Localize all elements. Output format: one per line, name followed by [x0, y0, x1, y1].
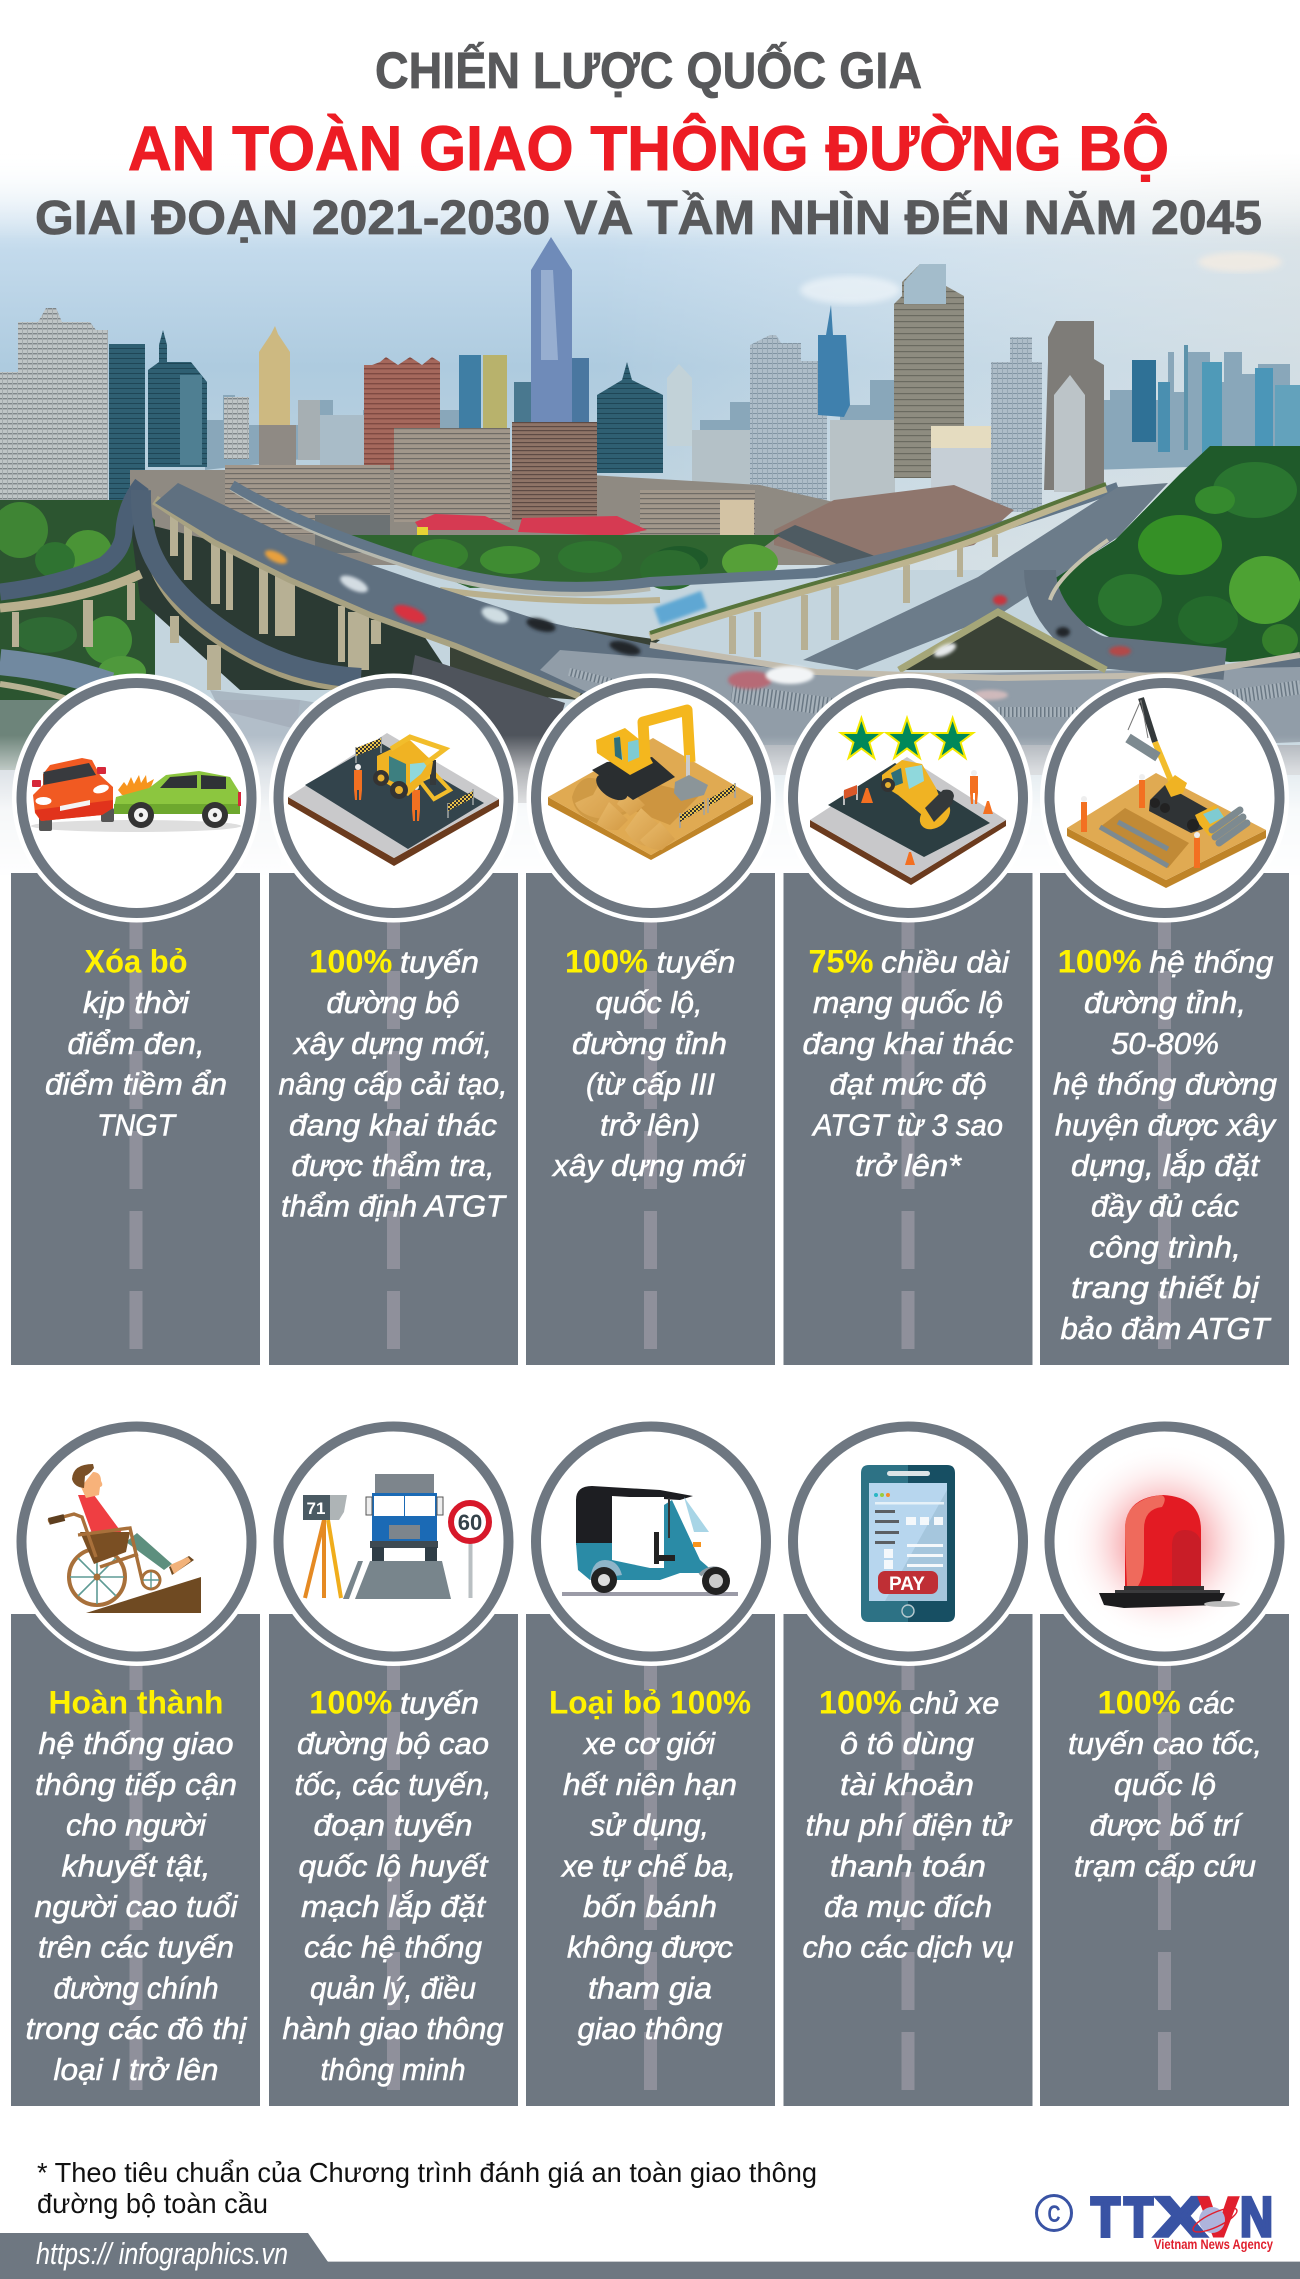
column text: row 1 column 5: đầy đủ các	[1091, 1189, 1239, 1224]
column text: row 2 column 2: tuyến	[400, 1686, 479, 1720]
icon: speed camera, truck and 60 sign: 71	[307, 1499, 325, 1518]
logo: TTXVN: Vietnam News Agency	[1154, 2236, 1273, 2252]
column text: row 1 column 3: (từ cấp III	[586, 1067, 715, 1102]
column text: row 2 column 5: các	[1188, 1686, 1235, 1720]
title line 1: CHIẾN LƯỢC QUỐC GIA	[375, 41, 922, 99]
column text: row 1 column 3: tuyến	[656, 944, 736, 980]
column text: row 1 column 3	[551, 944, 746, 1183]
footnote	[37, 2157, 817, 2219]
column text: row 1 column 5: dựng, lắp đặt	[1071, 1148, 1260, 1183]
footnote: đường bộ toàn cầu	[37, 2188, 268, 2219]
icon: red siren	[1064, 1443, 1264, 1643]
column text: row 2 column 4: thu phí điện tử	[806, 1808, 1013, 1843]
icon: phone with pay button: PAY	[889, 1574, 925, 1595]
column text: row 2 column 1: người cao tuổi	[34, 1889, 239, 1924]
worker	[970, 770, 978, 804]
column text: row 1 column 4	[802, 944, 1014, 1183]
column text: row 2 column 3: xe tự chế ba,	[560, 1848, 736, 1883]
column text: row 2 column 2: hành giao thông	[282, 2011, 504, 2046]
title	[35, 41, 1262, 245]
elevated roads	[232, 487, 650, 592]
column text: row 2 column 5	[1068, 1684, 1262, 1883]
column text: row 1 column 1: kịp thời	[83, 985, 190, 1020]
column text: row 1 column 4: 75%	[808, 944, 874, 980]
column text: row 1 column 2: đường bộ	[326, 985, 460, 1020]
column text: row 2 column 3	[549, 1684, 751, 2046]
worker 2	[412, 784, 420, 821]
column text: row 1 column 3: 100%	[565, 944, 648, 980]
column text: row 2 column 1: hệ thống giao	[38, 1726, 234, 1761]
column text: row 2 column 2: quản lý, điều	[310, 1970, 476, 2005]
column text: row 1 column 2: xây dựng mới,	[292, 1026, 492, 1061]
circular badges	[12, 674, 1288, 1666]
column text: row 1 column 4: trở lên*	[855, 1148, 962, 1183]
logo: TTXVN: X	[1155, 2185, 1206, 2248]
column text: row 2 column 5: 100%	[1098, 1684, 1181, 1720]
column text: row 1 column 2	[278, 944, 508, 1224]
column text: row 1 column 5: bảo đảm ATGT	[1060, 1311, 1272, 1346]
trees and under-bridge shadow	[0, 500, 155, 770]
column text: row 1 column 4: đang khai thác	[802, 1026, 1014, 1061]
column text: row 1 column 5: 50-80%	[1111, 1026, 1219, 1061]
stars	[841, 718, 973, 758]
column text: row 1 column 5: huyện được xây	[1055, 1107, 1277, 1142]
column text: row 2 column 2: mạch lắp đặt	[301, 1889, 486, 1924]
worker 1	[354, 764, 362, 800]
column text: row 2 column 2: tốc, các tuyến,	[294, 1767, 492, 1802]
icon: excavator on sand	[548, 710, 753, 860]
column text: row 2 column 1: Hoàn thành	[48, 1684, 224, 1720]
column text: row 2 column 5: được bố trí	[1090, 1808, 1244, 1843]
column text: row 2 column 2: đoạn tuyến	[314, 1808, 472, 1843]
column text: row 2 column 4: ô tô dùng	[840, 1726, 974, 1761]
road panels row 1	[11, 873, 1289, 1365]
column text: row 2 column 3: Loại bỏ 100%	[549, 1684, 751, 1720]
logo: TTXVN: T	[1124, 2185, 1153, 2248]
traffic	[263, 547, 1131, 700]
column text: row 1 column 3: đường tỉnh	[572, 1026, 727, 1061]
column text: row 1 column 1: Xóa bỏ	[84, 944, 188, 980]
column text: row 1 column 3: xây dựng mới	[551, 1148, 746, 1183]
column text: row 2 column 2: thông minh	[320, 2052, 466, 2087]
right woodland	[1047, 446, 1300, 662]
city skyline and highway photo	[0, 130, 1300, 875]
column text: row 1 column 5: công trình,	[1089, 1229, 1241, 1264]
column text: row 2 column 3: tham gia	[588, 1970, 712, 2005]
column text: row 1 column 2: 100%	[309, 944, 392, 980]
icon: wheelchair on ramp	[48, 1464, 201, 1613]
column text: row 1 column 2: đang khai thác	[289, 1107, 498, 1142]
road panels row 2	[11, 1614, 1289, 2106]
column text: row 2 column 4: tài khoản	[840, 1767, 974, 1802]
logo: TTXVN: C	[1048, 2201, 1060, 2228]
column text: row 1 column 3: quốc lộ,	[596, 985, 702, 1020]
icon: car crash	[31, 758, 241, 832]
icon: speed camera, truck and 60 sign: 60	[458, 1510, 482, 1535]
column text: row 2 column 1: khuyết tật,	[62, 1848, 210, 1883]
column text: row 2 column 5: tuyến cao tốc,	[1068, 1726, 1262, 1761]
far skyline	[205, 352, 1290, 470]
column text: row 2 column 4: chủ xe	[909, 1686, 999, 1720]
column text: row 2 column 4: cho các dịch vụ	[802, 1930, 1014, 1965]
logo: TTXVN: T	[1091, 2185, 1120, 2248]
logo: TTXVN: V	[1199, 2185, 1238, 2248]
column text: row 2 column 3: sử dụng,	[590, 1808, 709, 1843]
column text: row 2 column 3: xe cơ giới	[582, 1726, 716, 1761]
column text: row 1 column 5: hệ thống	[1149, 944, 1273, 980]
midrise city blocks	[130, 470, 890, 565]
column text: row 2 column 4: đa mục đích	[824, 1889, 992, 1924]
icon: speed camera, truck and 60 sign	[303, 1474, 489, 1599]
icon: three-wheeler	[562, 1486, 738, 1596]
column text: row 1 column 4: chiều dài	[881, 944, 1010, 980]
column text: row 2 column 2: 100%	[309, 1684, 392, 1720]
footer band with url tab: https:// infographics.vn	[36, 2236, 288, 2271]
column text: row 2 column 2: quốc lộ huyết	[298, 1848, 489, 1883]
lane dashes	[130, 891, 1171, 2090]
column text: row 2 column 1	[26, 1684, 248, 2087]
column text: row 2 column 4: thanh toán	[830, 1848, 986, 1883]
column text: row 2 column 3: bốn bánh	[583, 1889, 717, 1924]
icon: phone with pay button	[861, 1465, 955, 1622]
column text: row 2 column 1: đường chính	[54, 1970, 218, 2005]
icon: crane and pipes	[1067, 698, 1266, 888]
column text: row 1 column 2: tuyến	[400, 944, 479, 980]
column text: row 1 column 5: đường tỉnh,	[1084, 985, 1246, 1020]
column text: row 2 column 3: giao thông	[578, 2011, 722, 2046]
column text: row 2 column 2: đường bộ cao	[297, 1726, 489, 1761]
column text: row 1 column 1: điểm tiềm ẩn	[45, 1067, 227, 1102]
column text: row 1 column 2: được thẩm tra,	[292, 1148, 494, 1183]
column text: row 2 column 2: các hệ thống	[304, 1930, 482, 1965]
column text: row 2 column 5: quốc lộ	[1114, 1767, 1216, 1802]
title line 3: GIAI ĐOẠN 2021-2030 VÀ TẦM NHÌN ĐẾN NĂM 2045	[35, 191, 1262, 245]
column text: row 1 column 5	[1053, 944, 1277, 1346]
column text: row 2 column 4: 100%	[819, 1684, 902, 1720]
column text: row 2 column 2	[282, 1684, 504, 2087]
icon: road paving loader	[288, 733, 499, 866]
column text: row 2 column 1: cho người	[66, 1808, 207, 1843]
title line 2: AN TOÀN GIAO THÔNG ĐƯỜNG BỘ	[128, 113, 1169, 184]
column text: row 1 column 4: mạng quốc lộ	[813, 985, 1003, 1020]
column text: row 1 column 1: TNGT	[97, 1107, 177, 1142]
footnote: * Theo tiêu chuẩn của Chương trình đánh giá an toàn giao thông	[37, 2157, 817, 2188]
column text: row 1 column 4: ATGT từ 3 sao	[811, 1107, 1003, 1142]
column text: row 2 column 1: trong các đô thị	[26, 2011, 248, 2046]
column text: row 2 column 1: trên các tuyến	[38, 1930, 234, 1965]
column text: row 2 column 1: loại I trở lên	[54, 2052, 219, 2087]
icon: three stars and road roller	[810, 718, 1006, 885]
column text: row 1 column 2: nâng cấp cải tạo,	[278, 1067, 508, 1102]
flyover pillars	[12, 516, 1030, 690]
column text: row 1 column 5: 100%	[1058, 944, 1142, 980]
column text: row 2 column 5: trạm cấp cứu	[1074, 1848, 1256, 1883]
column text: row 1 column 4: đạt mức độ	[830, 1067, 986, 1102]
column text: row 2 column 3: hết niên hạn	[563, 1767, 737, 1802]
footer band with url tab	[0, 2233, 1300, 2279]
column text: row 1 column 1	[45, 944, 227, 1142]
column text: row 2 column 3: không được	[567, 1930, 734, 1965]
column text: row 1 column 1: điểm đen,	[68, 1026, 204, 1061]
logo: TTXVN	[1036, 2185, 1273, 2252]
column text: row 1 column 2: thẩm định ATGT	[281, 1189, 507, 1224]
column text: row 2 column 4	[802, 1684, 1014, 1965]
column text: row 1 column 3: trở lên)	[600, 1107, 700, 1142]
column text: row 1 column 5: trang thiết bị	[1071, 1270, 1260, 1305]
logo: TTXVN: N	[1240, 2185, 1273, 2248]
column text: row 1 column 5: hệ thống đường	[1053, 1067, 1277, 1102]
column text: row 2 column 1: thông tiếp cận	[35, 1767, 237, 1802]
towers	[0, 372, 18, 507]
